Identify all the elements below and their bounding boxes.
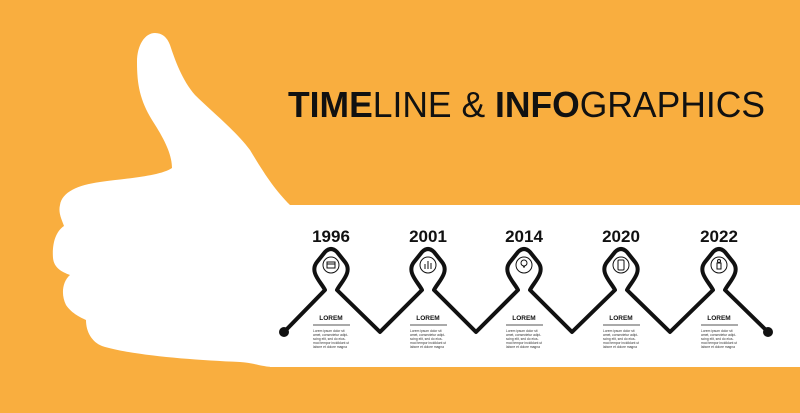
timeline path [284, 249, 768, 332]
body text: amet, consectetur adipi- [701, 333, 736, 337]
body text: mod tempor incididunt ut [603, 341, 639, 345]
body text: mod tempor incididunt ut [506, 341, 542, 345]
body text [313, 329, 737, 349]
body text: mod tempor incididunt ut [313, 341, 349, 345]
underlines [313, 324, 738, 326]
white band [270, 205, 800, 367]
years: 2014 [505, 227, 543, 246]
body text: amet, consectetur adipi- [313, 333, 348, 337]
LOREM labels: LOREM [609, 315, 633, 322]
node icons circles [323, 257, 727, 273]
body text: labore et dolore magna [701, 345, 735, 349]
body text: labore et dolore magna [313, 345, 347, 349]
thumbs up hand [53, 33, 290, 367]
years: 2020 [602, 227, 640, 246]
LOREM labels: LOREM [319, 315, 343, 322]
body text: labore et dolore magna [410, 345, 444, 349]
years [312, 227, 738, 246]
body text: Lorem ipsum dolor sit [410, 329, 442, 333]
body text: labore et dolore magna [603, 345, 637, 349]
body text: scing elit, sed do eius- [410, 337, 443, 341]
years: 2001 [409, 227, 447, 246]
LOREM labels [319, 315, 731, 322]
LOREM labels: LOREM [707, 315, 731, 322]
LOREM labels: LOREM [416, 315, 440, 322]
years: 2022 [700, 227, 738, 246]
body text: Lorem ipsum dolor sit [313, 329, 345, 333]
body text: scing elit, sed do eius- [313, 337, 346, 341]
body text: labore et dolore magna [506, 345, 540, 349]
body text: Lorem ipsum dolor sit [506, 329, 538, 333]
end dots [279, 327, 773, 337]
body text: scing elit, sed do eius- [506, 337, 539, 341]
body text: mod tempor incididunt ut [701, 341, 737, 345]
years: 1996 [312, 227, 350, 246]
title: TIMELINE & INFOGRAPHICS [288, 84, 765, 125]
body text: scing elit, sed do eius- [603, 337, 636, 341]
body text: amet, consectetur adipi- [410, 333, 445, 337]
body text: Lorem ipsum dolor sit [701, 329, 733, 333]
body text: scing elit, sed do eius- [701, 337, 734, 341]
body text: Lorem ipsum dolor sit [603, 329, 635, 333]
body text: mod tempor incididunt ut [410, 341, 446, 345]
body text: amet, consectetur adipi- [603, 333, 638, 337]
body text: amet, consectetur adipi- [506, 333, 541, 337]
LOREM labels: LOREM [512, 315, 536, 322]
